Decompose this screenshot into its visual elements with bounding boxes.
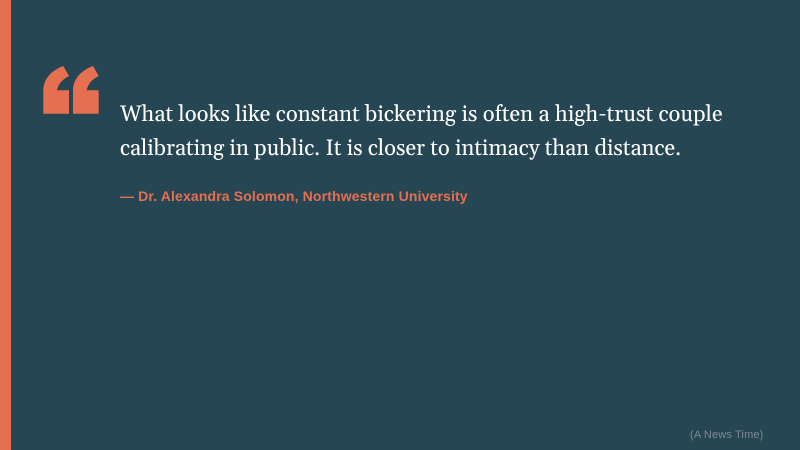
quote text: What looks like constant bickering is often a high-trust couple: [120, 101, 723, 129]
quote text: calibrating in public. It is closer to intimacy than distance.: [120, 135, 681, 163]
accent bar: [0, 0, 11, 450]
attribution: — Dr. Alexandra Solomon, Northwestern University: [120, 188, 468, 204]
source note: (A News Time): [690, 429, 763, 441]
icon: quotation mark: [43, 66, 99, 114]
quote text: [120, 101, 723, 163]
